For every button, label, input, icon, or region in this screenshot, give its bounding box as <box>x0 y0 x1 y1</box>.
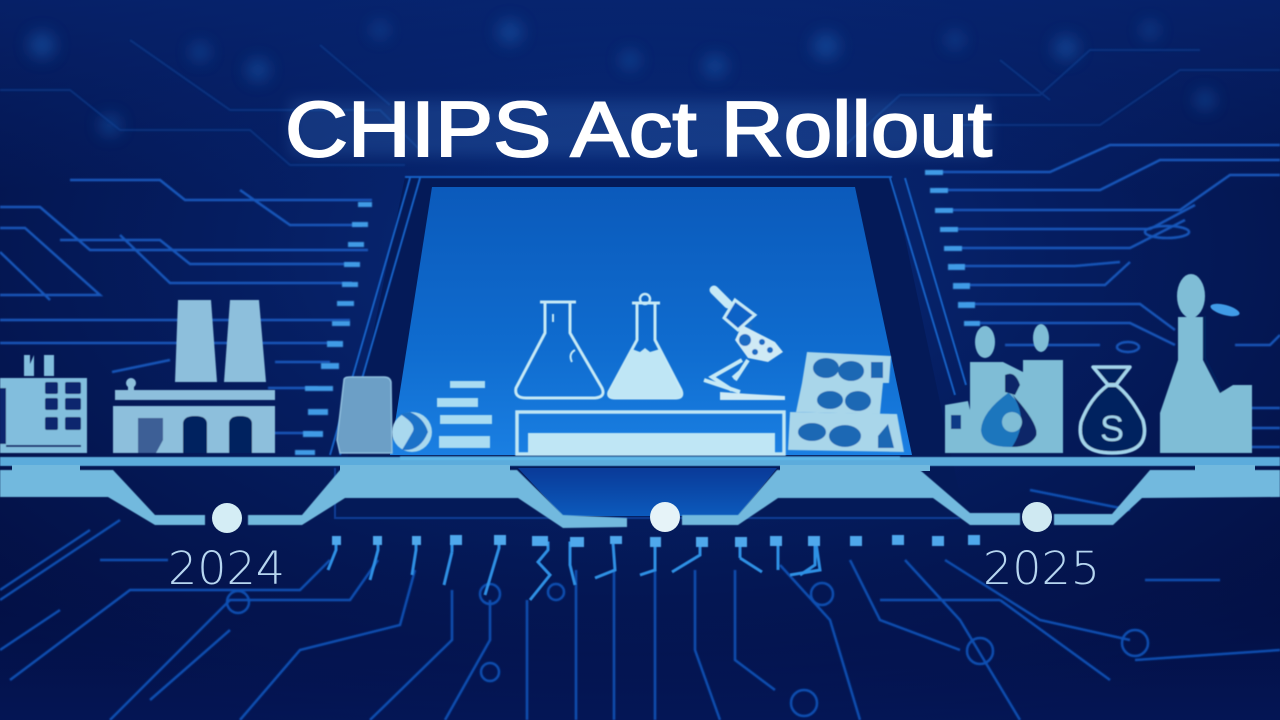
under-rail glow panel <box>518 468 777 516</box>
year label 2024: 2024 <box>168 542 285 595</box>
left factory <box>0 355 87 453</box>
chip pins right <box>925 170 980 326</box>
money bag icon: S <box>1100 408 1124 449</box>
lower circuit traces <box>0 490 1280 720</box>
chip die screen <box>390 187 912 455</box>
milestone dot centre <box>650 502 680 532</box>
server cylinder <box>337 377 392 453</box>
timeline trace segment after 2025 <box>1054 470 1280 525</box>
lab bench <box>517 412 784 454</box>
timeline trace segment centre to 2025 <box>682 470 1020 525</box>
banknote pile <box>788 352 904 452</box>
timeline trace segment 2024 to centre <box>248 470 627 528</box>
left circuit traces <box>0 180 372 433</box>
title glow <box>290 100 990 156</box>
power plant with cooling towers <box>113 300 275 453</box>
chip package outline <box>330 177 966 518</box>
timeline trace <box>0 470 205 525</box>
globe <box>392 412 432 452</box>
chip body shadow <box>335 177 965 520</box>
upper circuit traces <box>0 40 1280 165</box>
lower chip pins <box>328 543 820 600</box>
microscope <box>704 290 785 400</box>
conical flask outline <box>516 302 603 398</box>
right factory tower <box>1160 274 1252 453</box>
timeline rail connectors <box>12 465 1255 471</box>
title: CHIPS Act Rollout <box>285 85 992 173</box>
filled flask <box>608 294 682 398</box>
milestone dot 2024 <box>212 503 242 533</box>
chip pins left <box>295 202 372 455</box>
money bag icon <box>1080 367 1145 453</box>
right circuit traces <box>930 145 1280 447</box>
milestone dot 2025 <box>1022 502 1052 532</box>
lower pin pads <box>332 535 980 547</box>
year label 2025: 2025 <box>983 542 1100 595</box>
people with money bag <box>945 324 1063 453</box>
bokeh lights <box>29 20 1214 135</box>
timeline rail <box>0 456 1280 466</box>
book stack <box>437 381 492 448</box>
